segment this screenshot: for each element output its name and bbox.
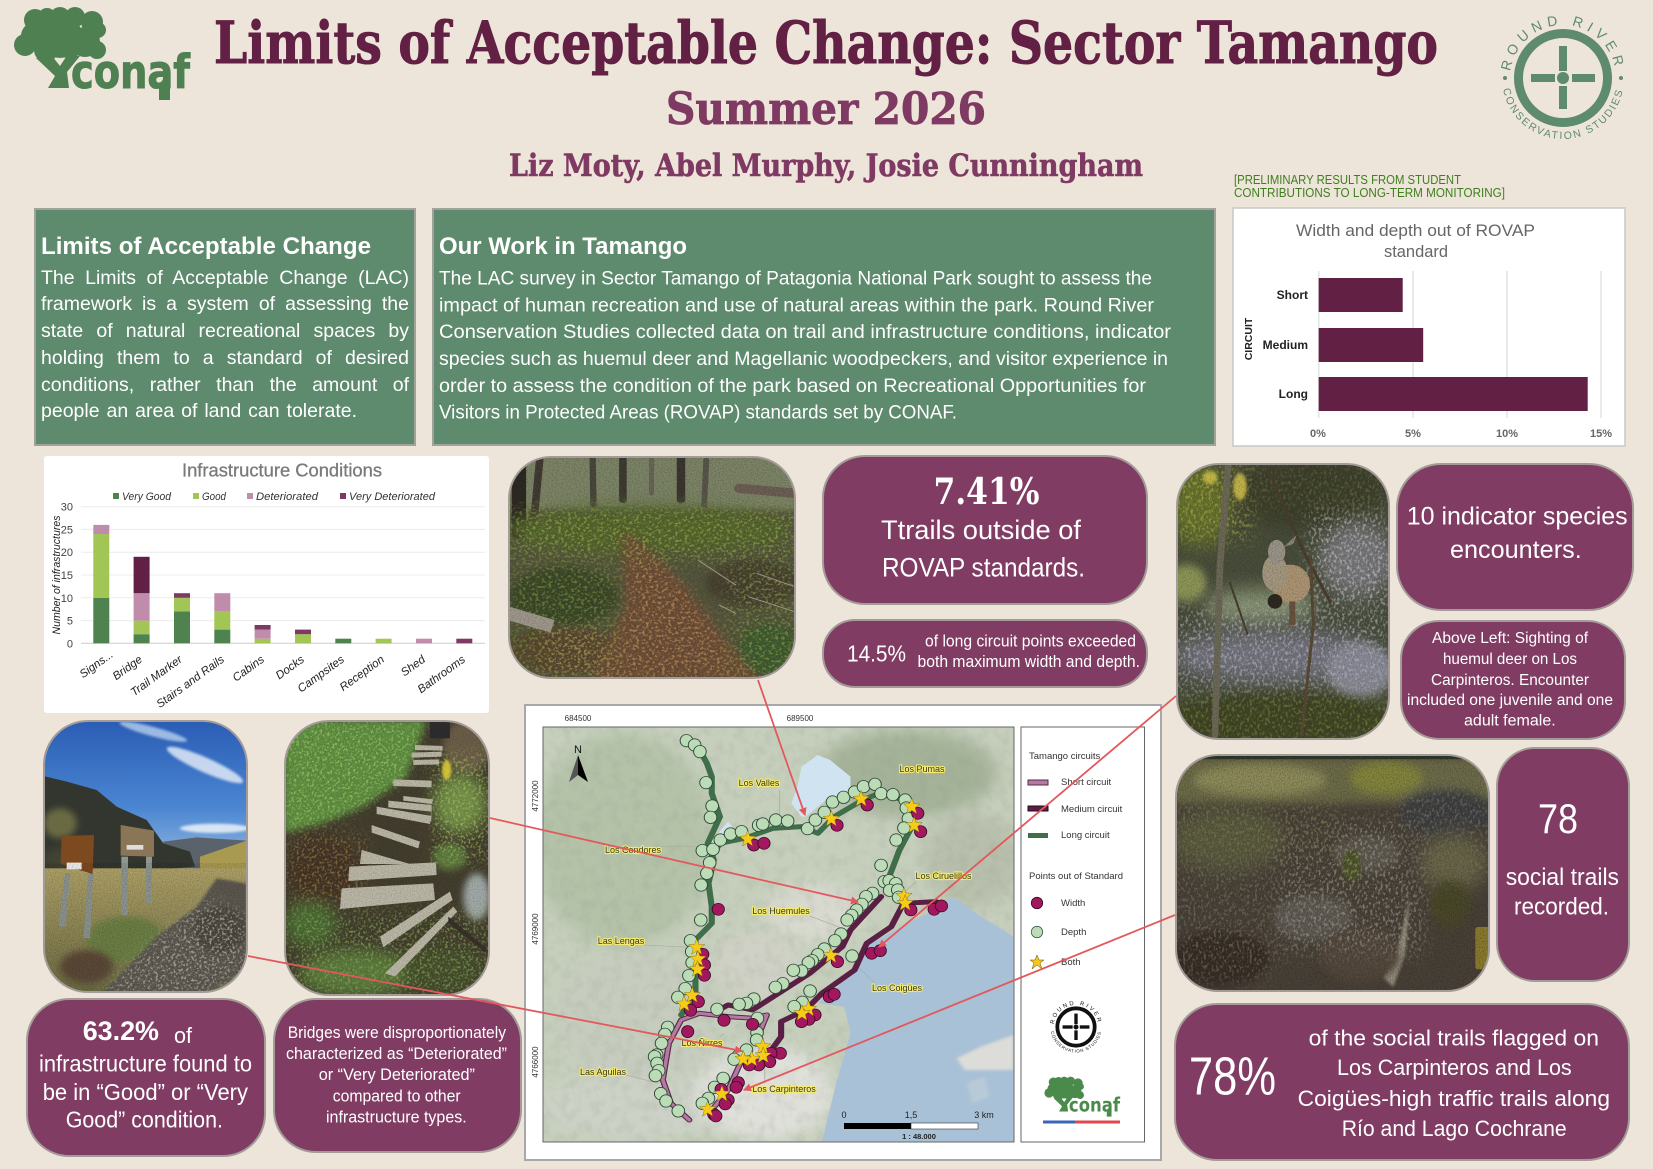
map legend: Long circuit [1061,830,1110,841]
stat box: 78% of social trails: 78% [1189,1046,1276,1106]
arrow: trail photo to map [758,680,805,815]
panel: Limits of Acceptable Change [35,209,415,445]
bars: Trail Marker [174,593,190,643]
bars: Stairs and Rails [214,593,230,643]
stacked bar chart: Infrastructure Conditions: 20 [61,547,73,559]
panel: Limits of Acceptable Change: conditions, rather than the amount of [41,374,409,396]
stat box: 78% of social trails: Los Carpinteros and Los [1337,1055,1572,1080]
stacked bar chart: Infrastructure Conditions: Bridge [111,654,145,683]
map: Tamango circuits: 4766000 [531,1046,540,1078]
stacked bar chart: Infrastructure Conditions: Cabins [231,654,267,684]
stacked bar chart: Infrastructure Conditions: Bathrooms [416,654,468,696]
note: preliminary results: CONTRIBUTIONS TO LONG-TERM MONITORING] [1234,186,1505,200]
subtitle: Summer 2026: Summer 2026 [666,84,986,135]
bar chart: width and depth out of ROVAP standard: 0% [1310,428,1326,440]
map legend: Short circuit [1061,777,1112,788]
logo: CONAF [14,7,191,100]
logo: Round River Conservation Studies [1500,16,1624,139]
panel: Our Work in Tamango: species such as huemul deer and Magellanic woodpeckers, and visitor experience in [439,348,1168,370]
photo: trail through forest [504,453,799,680]
stacked bar chart: Infrastructure Conditions: 5 [67,616,73,628]
bars: Cabins [255,625,271,643]
bar chart: width and depth out of ROVAP standard: 10% [1496,428,1518,440]
panel: Our Work in Tamango: Conservation Studies collected data on trail and infrastructure conditions, indicator [439,321,1172,343]
caption box: huemul deer sighting: included one juvenile and one [1407,692,1613,709]
map: Tamango circuits: Los Coigües [872,983,923,993]
icon: north arrow: N [574,744,582,756]
photo: huemul deer [1163,455,1393,744]
stat box: 63.2% of infrastructure [27,999,265,1156]
stacked bar chart: Infrastructure Conditions: Infrastructure Conditions [182,461,382,481]
logo: Round River small: CONSERVATION STUDIES [1051,1031,1101,1053]
stacked bar chart: Infrastructure Conditions: Reception [338,654,387,694]
map: Tamango circuits: 684500 [565,714,592,723]
panel: Our Work in Tamango: Our Work in Tamango [439,233,687,260]
arrow: sign photo to map [248,956,742,1051]
map legend: Tamango circuits [1029,751,1101,762]
circuit: medium [716,897,936,1053]
circuit: long [681,753,914,1015]
map: Tamango circuits: Las Lengas [598,936,645,946]
stat box: 78 social trails recorded: social trails [1506,864,1619,891]
map: Tamango circuits: 689500 [787,714,814,723]
stacked bar chart: Infrastructure Conditions: Trail Marker [129,653,186,699]
signpost: left [59,835,94,938]
stacked bar chart: Infrastructure Conditions: Very Good [122,491,172,503]
arrow: social trail photo to map [744,915,1175,1090]
logo: CONAF: conaf [71,45,191,99]
bar chart: width and depth out of ROVAP standard: 15% [1590,428,1612,440]
stat box: 78 social trails recorded: 78 [1538,795,1578,842]
text box: bridges deteriorated: characterized as “Deteriorated” [286,1045,507,1063]
points: width out of standard [682,799,948,1122]
foliage and leaf texture [283,720,490,997]
stacked bar chart: Infrastructure Conditions [44,456,489,713]
photo: deteriorated bridge [283,720,490,997]
map: Tamango circuits: Los Pumas [899,764,945,774]
stat box: 14.5% long circuit points: of long circuit points exceeded [925,633,1136,651]
stat box: 7.41% trails outside ROVAP: ROVAP standards. [882,553,1085,583]
deer figure [1262,535,1310,625]
bar chart: width and depth out of ROVAP standard [1233,208,1625,446]
panel: Our Work in Tamango: order to assess the condition of the park based on Recreational Opportunities for [439,375,1147,397]
stat box: 7.41% trails outside ROVAP: 7.41% [934,471,1040,513]
stat box: 7.41% trails outside ROVAP: Ttrails outside of [881,515,1081,545]
stat box: 78% of social trails: of the social trails flagged on [1309,1025,1599,1050]
scale bar: 1 : 48.000 [902,1132,936,1141]
stacked bar chart: Infrastructure Conditions: Deteriorated [256,491,319,503]
panel: Limits of Acceptable Change: holding them to a standard of desired [41,347,409,369]
panel: Our Work in Tamango: The LAC survey in Sector Tamango of Patagonia National Park sought to assess the [439,268,1152,290]
stat box: 10 indicator species encounters: 10 indicator species [1407,502,1628,530]
bar chart: width and depth out of ROVAP standard: CIRCUIT [1243,317,1255,360]
stat box: 10 indicator species encounters: encounters. [1450,536,1582,564]
caption box: huemul deer sighting: huemul deer on Los [1443,651,1577,668]
map legend: Points out of Standard [1029,871,1123,882]
text box: bridges deteriorated: Bridges were disproportionately [288,1024,507,1042]
stat box: 78% of social trails: Río and Lago Cochrane [1342,1116,1567,1141]
map legend: Both [1061,957,1081,968]
panel: map frame [525,705,1161,1160]
stat box: 78% of social trails [1175,1004,1629,1160]
authors: Liz Moty, Abel Murphy, Josie Cunningham [509,148,1143,184]
map: Tamango circuits: Los Ñirres [681,1038,723,1048]
gravel texture [100,897,247,995]
stat box: 78% of social trails: Coigües-high traffic trails along [1298,1086,1610,1111]
map legend: Width [1061,898,1085,909]
stat box: 14.5% long circuit points [823,620,1147,687]
stat box: 63.2% of infrastructure: Good” condition. [66,1107,223,1133]
caption box: huemul deer sighting [1401,621,1625,739]
logo: CONAF small [1044,1077,1120,1117]
map: Tamango circuits: Los Ciruelillos [915,871,972,881]
icon: north arrow [569,744,588,782]
panel: Limits of Acceptable Change: people an area of land can tolerate. [41,400,357,422]
stacked bar chart: Infrastructure Conditions: 15 [61,570,73,582]
bar chart: width and depth out of ROVAP standard: Long [1279,387,1308,401]
leaf and foliage texture [508,507,799,680]
photo: trail signs and mountains [43,718,250,997]
caption box: huemul deer sighting: Carpinteros. Encounter [1431,672,1589,689]
scale bar [841,1110,994,1141]
stacked bar chart: Infrastructure Conditions: Campsites [296,654,347,695]
stat box: 63.2% of infrastructure: be in “Good” or “Very [43,1079,248,1105]
stacked bar chart: Infrastructure Conditions: Docks [274,654,307,682]
text box: bridges deteriorated [274,999,521,1152]
bars: Signs [93,525,109,643]
arrow: bridge photo to map [490,818,858,902]
bar chart: width and depth out of ROVAP standard: Width and depth out of ROVAP [1296,221,1535,240]
rock texture [1173,780,1493,982]
stat box: 78 social trails recorded: recorded. [1514,894,1609,921]
stacked bar chart: Infrastructure Conditions: 10 [61,593,73,605]
panel: Our Work in Tamango [433,209,1215,445]
arrow: deer photo to map [879,696,1176,947]
map: Tamango circuits: Los Huemules [752,906,810,916]
logo: Round River small [1050,1001,1102,1053]
stacked bar chart: Infrastructure Conditions: Signs... [78,649,116,681]
stat box: 14.5% long circuit points: both maximum width and depth. [918,653,1140,671]
caption box: huemul deer sighting: Above Left: Sighting of [1432,630,1589,647]
map: Tamango circuits: Los Carpinteros [752,1084,816,1094]
scale bar: 1,5 [905,1110,917,1120]
panel: Our Work in Tamango: impact of human recreation and use of natural areas within the park. Round River [439,294,1155,316]
logo: Round River small: ROUND RIVER [1050,1001,1102,1024]
stat box: 63.2% of infrastructure: infrastructure found to [39,1051,252,1077]
stacked bar chart: Infrastructure Conditions: Number of infrastructures [51,515,63,634]
map legend: Depth [1061,927,1086,938]
caption box: huemul deer sighting: adult female. [1464,713,1556,730]
stat box: 14.5% long circuit points: 14.5% [847,641,906,667]
map: Tamango circuits: Los Condores [605,845,662,855]
stat box: 7.41% trails outside ROVAP [823,456,1147,604]
map: Tamango circuits [531,714,1022,1142]
circuit: short [663,1013,767,1120]
bars: Docks [295,630,311,643]
stat box: 63.2% of infrastructure: of [174,1023,193,1048]
logo: Round River Conservation Studies: CONSERVATION STUDIES [1504,88,1622,139]
text box: bridges deteriorated: infrastructure types. [326,1108,467,1126]
note: preliminary results: [PRELIMINARY RESULTS FROM STUDENT [1234,173,1461,187]
text box: bridges deteriorated: compared to other [333,1087,461,1105]
stacked bar chart: Infrastructure Conditions: Stairs and Rails [155,654,227,711]
stacked bar chart: Infrastructure Conditions: Very Deteriorated [349,491,436,503]
stacked bar chart: Infrastructure Conditions: 25 [61,524,73,536]
map: Tamango circuits: Las Aguilas [580,1067,627,1077]
photo: eroded social trail [1170,753,1493,996]
panel: Limits of Acceptable Change: The Limits of Acceptable Change (LAC) [41,266,409,288]
points: depth out of standard [648,734,915,1117]
points: both out of standard [676,790,922,1116]
stacked bar chart: Infrastructure Conditions: 0 [67,638,73,650]
bar chart: width and depth out of ROVAP standard: Short [1277,288,1308,302]
signpost: right [121,825,154,915]
stacked bar chart: Infrastructure Conditions: Shed [399,653,428,679]
logo: Round River Conservation Studies: ROUND RIVER [1500,16,1624,70]
bar chart: width and depth out of ROVAP standard: 5% [1405,428,1421,440]
scale bar: 0 [841,1110,847,1120]
text box: bridges deteriorated: or “Very Deteriorated” [319,1066,475,1084]
map: Tamango circuits: 4772000 [531,780,540,812]
logo: CONAF small: conaf [1069,1093,1120,1116]
foliage and rock texture [1173,464,1390,744]
stat box: 63.2% of infrastructure: 63.2% [83,1016,159,1046]
stat box: 78 social trails recorded [1497,748,1629,981]
lake: Lago Cochrane [818,897,1014,1142]
bars: Bridge [134,557,150,643]
stacked bar chart: Infrastructure Conditions: 30 [61,502,73,514]
bar chart: width and depth out of ROVAP standard: Medium [1263,338,1308,352]
note: preliminary results [1234,173,1505,200]
map: Tamango circuits: Los Valles [739,778,780,788]
bars: remaining categories [335,639,472,643]
scale bar: 3 km [974,1110,994,1120]
panel: Limits of Acceptable Change: state of natural recreational spaces by [41,320,409,342]
panel: Limits of Acceptable Change: framework is a system of assessing the [41,293,409,315]
map legend: Medium circuit [1061,804,1123,815]
panel: Our Work in Tamango: Visitors in Protected Areas (ROVAP) standards set by CONAF. [439,402,957,424]
map legend [1020,726,1145,1142]
map: Tamango circuits: 4769000 [531,913,540,945]
lake: upper lagoon [791,755,850,817]
stat box: 10 indicator species encounters [1397,464,1633,610]
bar chart: width and depth out of ROVAP standard: standard [1384,242,1448,261]
panel: Limits of Acceptable Change: Limits of Acceptable Change [41,233,371,260]
stacked bar chart: Infrastructure Conditions: Good [202,491,227,503]
